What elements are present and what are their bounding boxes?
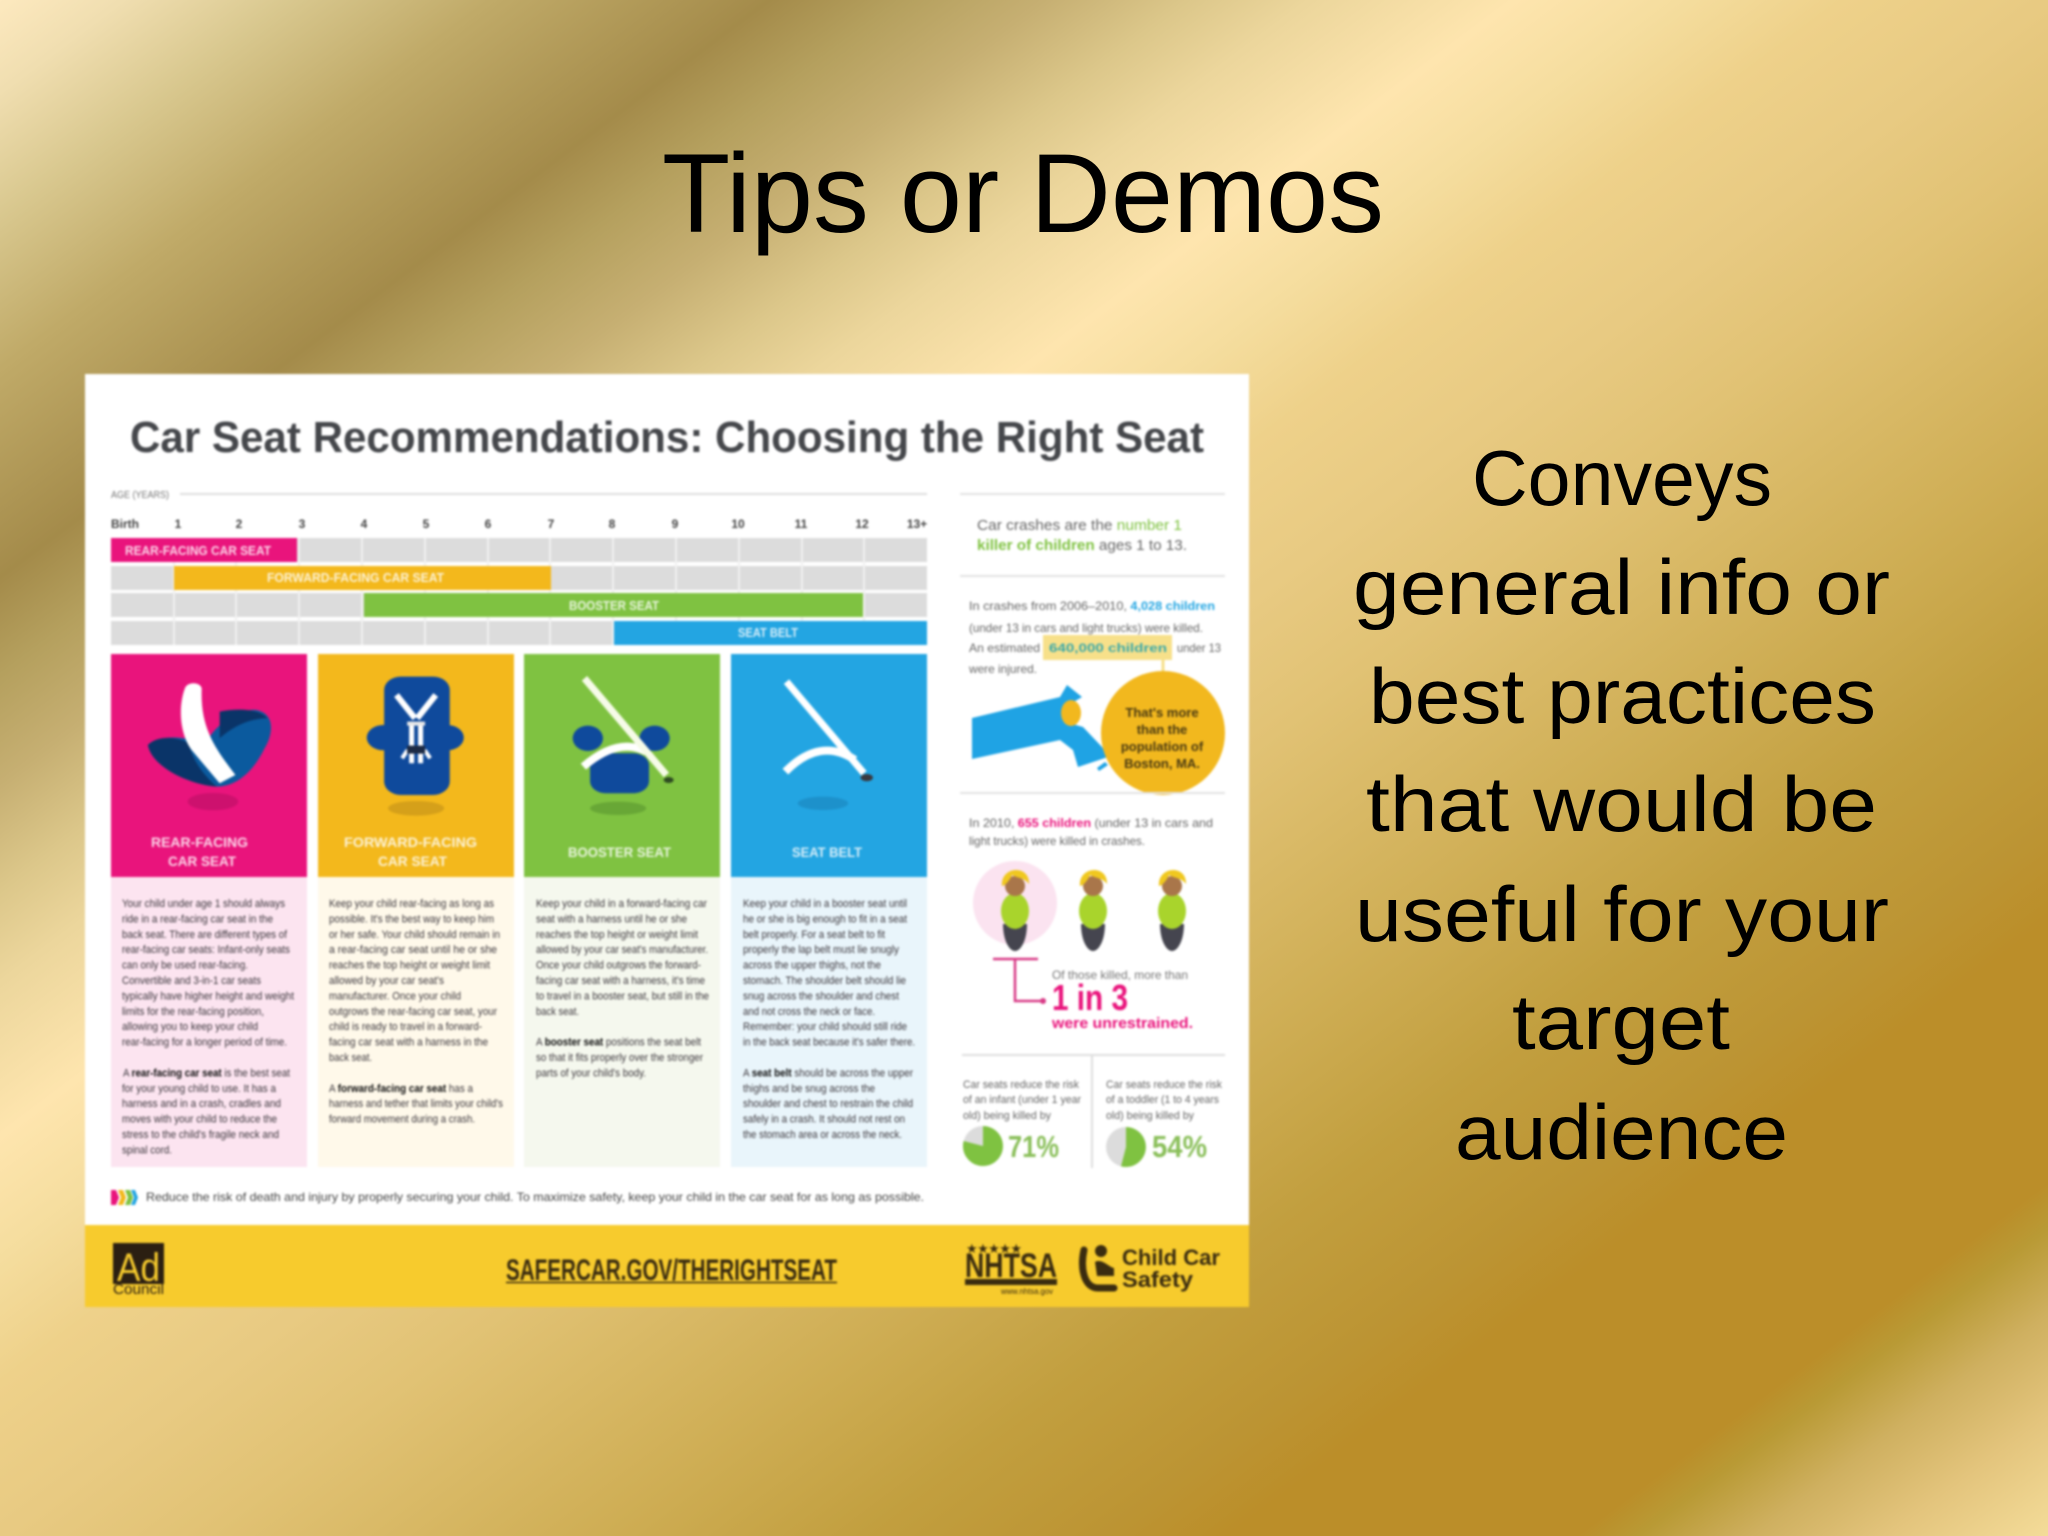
text panel: rear-facing: spinal cord. [122, 1144, 172, 1156]
footer band [85, 1225, 1249, 1307]
card: booster [524, 654, 720, 877]
card label: BOOSTER SEAT [568, 844, 671, 860]
card label: CAR SEAT [378, 853, 447, 869]
icon: harness seat [367, 677, 464, 816]
text panel: seat belt: snug across the shoulder and chest [743, 990, 899, 1002]
age ticks: 1 [175, 517, 182, 531]
age ticks: 2 [236, 517, 243, 531]
logo: Ad Council: Council [113, 1281, 164, 1298]
text panel: seat belt: stomach. The shoulder belt should lie [743, 975, 906, 987]
grey grid rows [111, 538, 927, 645]
bar: seat belt [614, 621, 927, 645]
text panel: forward-facing: A forward-facing car seat has a [329, 1083, 474, 1095]
age ticks: 4 [361, 517, 368, 531]
stat: 655 children [969, 816, 1213, 1032]
text panel: booster: allowed by your car seat's manufacturer. [536, 944, 708, 956]
icon: child 2 [1079, 870, 1107, 951]
slide body text [1353, 434, 1890, 1176]
reminder strip [111, 1190, 924, 1205]
text panel: booster: Keep your child in a forward-facing car [536, 898, 707, 910]
icon: booster seat [573, 678, 674, 815]
highlight box [1043, 635, 1172, 660]
bar: booster [364, 593, 863, 617]
text panel: forward-facing: outgrows the rear-facing car seat, your [329, 1006, 497, 1018]
stat: toddler 54%: Car seats reduce the risk [1106, 1079, 1222, 1091]
text panel: rear-facing: moves with your child to reduce the [122, 1114, 277, 1126]
bracket arrow [993, 959, 1046, 1004]
text panel: seat belt: and not cross the neck or face. [743, 1006, 875, 1018]
panel: car seat infographic [85, 374, 1249, 1307]
stat: number 1 killer: killer of children ages 1 to 13. [977, 537, 1187, 554]
map: Massachusetts [972, 685, 1108, 771]
text panel: seat belt: Remember: your child should still ride [743, 1021, 907, 1033]
text panel: booster: A booster seat positions the seat belt [536, 1037, 701, 1049]
logo: Child Car Safety [1083, 1245, 1220, 1292]
text panel: booster [524, 877, 720, 1167]
text panel: seat belt: properly the lap belt must lie snugly [743, 944, 899, 956]
text panel: seat belt: across the upper thighs, not the [743, 960, 881, 972]
highlight circle [973, 861, 1057, 945]
card: rear-facing [111, 654, 307, 877]
1 in 3 stat: 1 in 3 [1052, 977, 1128, 1018]
card: forward-facing [318, 654, 514, 877]
text panel: booster: seat with a harness until he or she [536, 913, 687, 925]
text panel: booster: parts of your child's body. [536, 1067, 646, 1079]
stat: crashes 2006-2010: An estimated [969, 641, 1040, 655]
slide body text: target [1512, 978, 1730, 1066]
text panel: forward-facing: or her safe. Your child should remain in [329, 929, 500, 941]
text panel: booster: facing car seat with a harness, it's time [536, 975, 705, 987]
bar: booster: BOOSTER SEAT [569, 598, 659, 613]
1 in 3 stat [1051, 968, 1193, 1032]
card label [344, 834, 477, 869]
text panel: rear-facing: Convertible and 3-in-1 car seats [122, 975, 261, 987]
logo: NHTSA: ★★★★★ [966, 1241, 1022, 1256]
text panel: rear-facing: rear-facing for a longer period of time. [122, 1037, 287, 1049]
age ticks: 8 [609, 517, 616, 531]
stat: crashes 2006-2010 [960, 599, 1225, 795]
text panel: seat belt: Keep your child in a booster seat until [743, 898, 907, 910]
text panel: rear-facing: rear-facing car seats: Infant-only seats [122, 944, 290, 956]
text panel: booster: Once your child outgrows the forward- [536, 960, 701, 972]
stat: toddler 54% [1106, 1079, 1222, 1167]
icon: infant seat [148, 683, 271, 810]
slide title: Tips or Demos [662, 131, 1384, 256]
text panel: rear-facing: stress to the child's fragile neck and [122, 1129, 279, 1141]
text panel: seat belt: safely in a crash. It should not rest on [743, 1114, 905, 1126]
text panel: rear-facing: A rear-facing car seat is the best seat [123, 1067, 290, 1079]
connector [1162, 660, 1164, 695]
text panel: rear-facing: can only be used rear-facing. [122, 960, 248, 972]
card label: FORWARD-FACING [344, 834, 477, 850]
bar: rear-facing: REAR-FACING CAR SEAT [125, 543, 271, 558]
logo: Child Car Safety: Child Car [1122, 1245, 1220, 1270]
slide body text: best practices [1369, 652, 1876, 740]
text panel: booster: back seat. [536, 1006, 579, 1018]
stats: car seat risk reduction [962, 1055, 1225, 1168]
age ticks: 13+ [907, 517, 927, 531]
age ticks: 5 [423, 517, 430, 531]
slide body text: audience [1455, 1088, 1788, 1176]
stat: infant 71%: 71% [1008, 1129, 1059, 1164]
text panel: seat belt: belt properly. For a seat belt to fit [743, 929, 885, 941]
bar: forward-facing [174, 566, 551, 590]
text panel: seat belt: the stomach area or across the neck. [743, 1129, 902, 1141]
age ticks [111, 517, 927, 531]
text panel: forward-facing: child is ready to travel in a forward- [329, 1021, 482, 1033]
text panel: forward-facing: facing car seat with a harness in the [329, 1037, 488, 1049]
text panel: seat belt: he or she is big enough to fit in a seat [743, 913, 907, 925]
age ticks: 7 [548, 517, 555, 531]
text panel: rear-facing: typically have higher height and weight [122, 990, 294, 1002]
card label: REAR-FACING [151, 834, 248, 850]
icon: coloured chevrons [111, 1190, 138, 1205]
text panel: booster: reaches the top height or weight limit [536, 929, 698, 941]
slide body text: Conveys [1472, 434, 1772, 522]
text panel: forward-facing: manufacturer. Once your child [329, 990, 461, 1002]
icon: child 1 [1001, 870, 1029, 951]
card: seat belt [731, 654, 927, 877]
stat: infant 71% [963, 1079, 1081, 1166]
1 in 3 stat: Of those killed, more than [1052, 968, 1188, 982]
text panel: forward-facing: possible. It's the best way to keep him [329, 913, 494, 925]
text panel: seat belt: in the back seat because it's safer there. [743, 1037, 915, 1049]
age ticks: 6 [485, 517, 492, 531]
text panel: forward-facing: reaches the top height or weight limit [329, 960, 490, 972]
callout: Boston: population of [1121, 739, 1204, 754]
stat: crashes 2006-2010: In crashes from 2006–2010, 4,028 children [969, 599, 1215, 613]
text panel: seat belt: thighs and be snug across the [743, 1083, 875, 1095]
text panel: rear-facing: allowing you to keep your child [122, 1021, 258, 1033]
reminder text: Reduce the risk of death and injury by properly securing your child. To maximize safety, keep your child in the car seat for as long as possible. [146, 1190, 924, 1204]
bar: seat belt: SEAT BELT [738, 625, 798, 640]
icon: seat belt [785, 682, 873, 810]
stat: 655 children: In 2010, 655 children (under 13 in cars and [969, 816, 1213, 830]
infographic title: Car Seat Recommendations: Choosing the Right Seat [130, 413, 1204, 462]
text panel: forward-facing: back seat. [329, 1052, 372, 1064]
text panel: rear-facing: ride in a rear-facing car seat in the [122, 913, 273, 925]
logo: NHTSA: www.nhtsa.gov [1000, 1287, 1053, 1296]
stat: crashes 2006-2010: (under 13 in cars and light trucks) were killed. [969, 621, 1203, 635]
text panel: forward-facing: Keep your child rear-facing as long as [329, 898, 494, 910]
stat: toddler 54%: 54% [1152, 1129, 1207, 1164]
stat: infant 71%: of an infant (under 1 year [963, 1094, 1081, 1106]
bar: forward-facing: FORWARD-FACING CAR SEAT [267, 570, 444, 585]
logo: Child Car Safety: Safety [1122, 1267, 1194, 1292]
age ticks: 3 [299, 517, 306, 531]
text panel: seat belt: shoulder and chest to restrain the child [743, 1098, 913, 1110]
callout: Boston [1101, 671, 1225, 795]
card label: CAR SEAT [168, 853, 236, 869]
age ticks: Birth [111, 517, 139, 531]
callout: Boston: than the [1137, 722, 1187, 737]
text panel: seat belt [731, 877, 927, 1167]
stat: 655 children: light trucks) were killed in crashes. [969, 834, 1145, 848]
callout: Boston: Boston, MA. [1124, 756, 1200, 771]
callout: Boston: That's more [1125, 705, 1199, 720]
stat: infant 71%: old) being killed by [963, 1110, 1051, 1122]
icon: map pin [1061, 700, 1081, 726]
stat: infant 71%: Car seats reduce the risk [963, 1079, 1079, 1091]
slide body text: that would be [1366, 760, 1877, 848]
URL: SAFERCAR.GOV/THERIGHTSEAT [506, 1254, 837, 1287]
stat: crashes 2006-2010: 640,000 children [1049, 641, 1167, 655]
text panel: forward-facing [318, 877, 514, 1167]
icon: child 3 [1158, 870, 1186, 951]
text panel: forward-facing: allowed by your car seat's [329, 975, 444, 987]
age axis label: AGE (YEARS) [111, 490, 169, 501]
bar: rear-facing [111, 538, 297, 562]
card label: SEAT BELT [792, 844, 862, 860]
age ticks: 12 [855, 517, 869, 531]
text panel: rear-facing: for your young child to use. It has a [122, 1083, 277, 1095]
panel background [85, 374, 1249, 1307]
logo: NHTSA [965, 1241, 1057, 1296]
text panel: rear-facing: Your child under age 1 should always [122, 898, 285, 910]
text panel: booster: to travel in a booster seat, but still in the [536, 990, 709, 1002]
stat: toddler 54%: of a toddler (1 to 4 years [1106, 1094, 1219, 1106]
stat: crashes 2006-2010: under 13 [1177, 641, 1221, 655]
stat: number 1 killer: Car crashes are the number 1 [977, 517, 1182, 534]
stat: crashes 2006-2010: were injured. [968, 662, 1037, 676]
age chart [111, 490, 927, 645]
text panel: forward-facing: forward movement during a crash. [329, 1114, 475, 1126]
text panel: rear-facing [111, 877, 307, 1167]
text panel: booster: so that it fits properly over the stronger [536, 1052, 703, 1064]
1 in 3 stat: were unrestrained. [1051, 1015, 1193, 1032]
text panel: forward-facing: a rear-facing car seat until he or she [329, 944, 497, 956]
text panel: forward-facing: harness and tether that limits your child's [329, 1098, 503, 1110]
logo: Ad Council: Ad [117, 1246, 160, 1290]
text panel: rear-facing: harness and in a crash, cradles and [122, 1098, 281, 1110]
age ticks: 11 [795, 517, 808, 531]
stat: toddler 54%: old) being killed by [1106, 1110, 1194, 1122]
logo: NHTSA: NHTSA [965, 1247, 1057, 1285]
age ticks: 9 [672, 517, 679, 531]
slide body text: useful for your [1355, 870, 1889, 958]
text panel: seat belt: A seat belt should be across the upper [743, 1067, 913, 1079]
stat: number 1 killer [960, 494, 1225, 576]
slide body text: general info or [1353, 543, 1890, 631]
card label [151, 834, 248, 869]
text panel: rear-facing: limits for the rear-facing position, [122, 1006, 264, 1018]
age ticks: 10 [731, 517, 745, 531]
text panel: rear-facing: back seat. There are different types of [122, 929, 288, 941]
